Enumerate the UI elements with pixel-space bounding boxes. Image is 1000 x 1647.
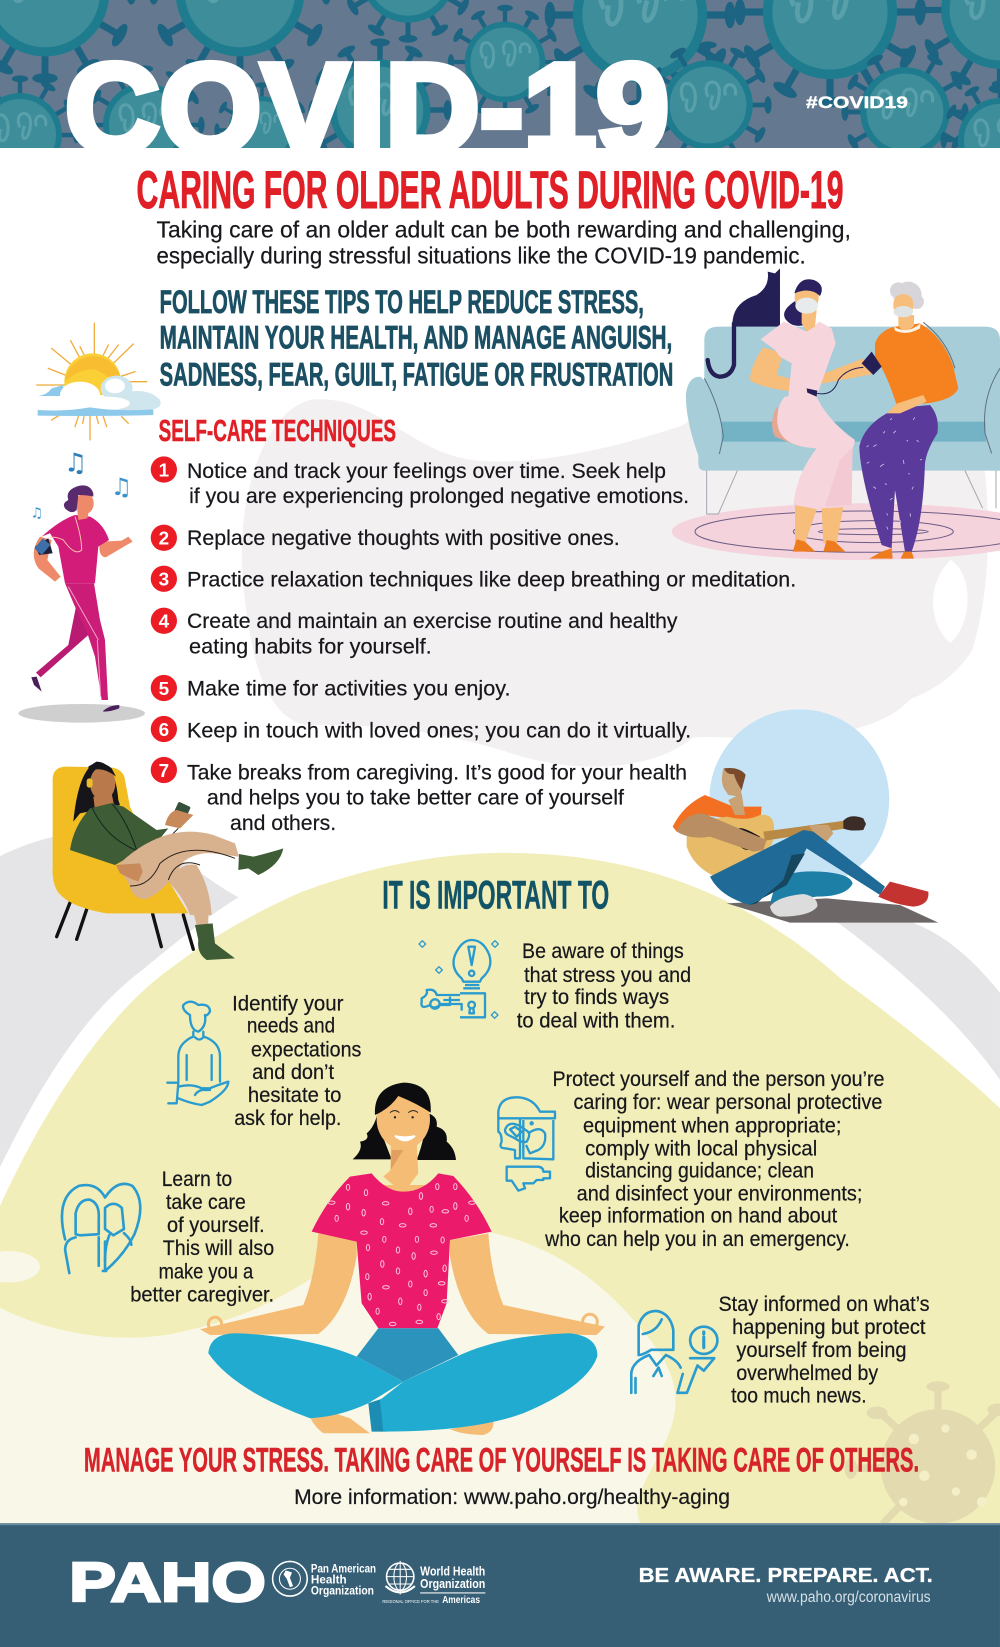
text: be aware [517,939,691,1032]
intro paragraph: especially during stressful situations like the COVID-19 pandemic. [157,243,806,269]
icon: couple inside heart [62,1184,140,1273]
text: learn to take care [130,1167,274,1306]
text: identify your needs: and don’t [252,1060,334,1084]
cat [708,268,780,377]
icon: person in open hand [167,1002,228,1105]
text: protect yourself: distancing guidance; clean [585,1158,814,1182]
item 3: 3 [159,570,169,591]
PAHO name: Health [311,1572,347,1586]
item 1 [151,456,689,508]
item 7: and helps you to take better care of yourself [207,786,625,810]
intro paragraph: Taking care of an older adult can be both rewarding and challenging, [157,216,851,242]
hair sides [353,1110,392,1159]
item 2: 2 [159,529,169,550]
text: stay informed: happening but protect [732,1315,925,1339]
WHO name: World Health [420,1565,485,1579]
PAHO name: Pan American [311,1561,376,1575]
item 7 [151,757,687,835]
shirt [312,1173,492,1328]
text: stay informed: Stay informed on what’s [718,1292,930,1316]
item 7: and others. [230,811,336,835]
item 4: Create and maintain an exercise routine and healthy [187,609,678,633]
item 1: if you are experiencing prolonged negative emotions. [189,484,689,508]
main title COVID-19: COVID-19 [65,37,669,179]
header banner [0,0,1000,148]
item 6: Keep in touch with loved ones; you can do it virtually. [187,718,691,742]
text: protect yourself: equipment when appropriate; [583,1113,841,1137]
icon: WHO emblem [385,1561,415,1595]
illustration: woman jogging with music [18,449,145,723]
PAHO name: Organization [311,1584,374,1598]
icon: light bulb and key [419,940,498,1018]
text: protect yourself: and disinfect your environments; [577,1182,862,1206]
item 4: 4 [159,612,170,633]
footer url: www.paho.org/coronavirus [766,1589,931,1606]
WHO name: REGIONAL OFFICE FOR THE [382,1599,439,1605]
WHO name: Organization [420,1577,485,1591]
text: protect yourself: Protect yourself and the person you’re [553,1067,884,1091]
text: protect yourself: comply with local physical [585,1136,817,1160]
music notes [31,449,132,521]
rug [672,503,1000,560]
text: identify your needs: hesitate to [248,1083,341,1107]
item 4: eating habits for yourself. [189,634,432,658]
music notes: ♫ [64,449,87,479]
older woman [859,282,958,559]
music notes: ♫ [111,473,132,501]
item 6: 6 [159,720,169,741]
text: learn to take care: better caregiver. [130,1282,274,1306]
text: stay informed: yourself from being [736,1338,906,1362]
illustration: meditating woman [200,1083,605,1435]
sofa [686,327,1000,514]
PAHO logo text: PAHO [69,1552,266,1613]
text: stay informed: too much news. [731,1383,867,1407]
WHO name: Americas [442,1595,480,1606]
illustration: nurse and older woman on sofa [672,268,1000,560]
header virus pattern [0,0,1000,148]
heading: follow these tips: FOLLOW THESE TIPS TO HELP REDUCE STRESS, [160,284,644,320]
text: learn to take care: make you a [159,1259,253,1283]
item 1: Notice and track your feelings over time. Seek help [187,459,666,483]
PAHO name [311,1561,376,1598]
text: be aware: to deal with them. [517,1008,675,1032]
item 4 [151,608,678,658]
item 7: Take breaks from caregiving. It’s good for your health [187,760,687,784]
intro paragraph [157,216,851,269]
text: learn to take care: This will also [163,1236,274,1260]
text: be aware: Be aware of things [522,939,684,963]
hashtag: #COVID19 [806,93,908,112]
text: stay informed [718,1292,930,1407]
text: protect yourself: keep information on hand about [559,1204,837,1228]
item 5: 5 [159,679,169,700]
item 3: Practice relaxation techniques like deep breathing or meditation. [187,568,796,592]
text: protect yourself [544,1067,884,1251]
tagline: BE AWARE. PREPARE. ACT. [639,1565,933,1587]
background virus bottom right [845,1381,1000,1524]
text: learn to take care: of yourself. [167,1213,265,1237]
music notes: ♫ [31,505,43,521]
text: learn to take care: Learn to [162,1167,232,1191]
WHO name [382,1565,485,1606]
item 1: 1 [159,460,169,481]
item 2: Replace negative thoughts with positive ones. [187,526,620,550]
text: identify your needs [232,991,361,1130]
icon: PAHO emblem [273,1561,307,1596]
background shapes [0,347,1000,1524]
heading: follow these tips [160,284,673,392]
text: be aware: try to finds ways [524,985,669,1009]
nurse [750,279,873,552]
text: stay informed: overwhelmed by [736,1361,878,1385]
heading: follow these tips: SADNESS, FEAR, GUILT, FATIGUE OR FRUSTRATION [160,356,673,392]
text: learn to take care: take care [166,1190,246,1214]
item 7: 7 [159,761,169,782]
jeans [357,1328,458,1382]
footer band [0,1523,1000,1647]
text: be aware: that stress you and [524,963,691,987]
text: identify your needs: expectations [251,1038,361,1062]
text: identify your needs: ask for help. [234,1106,341,1130]
illustration: man playing guitar [673,709,938,923]
text: identify your needs: Identify your [232,991,343,1015]
heading: follow these tips: MAINTAIN YOUR HEALTH, AND MANAGE ANGUISH, [160,320,672,356]
heading: it is important to: IT IS IMPORTANT TO [382,874,609,918]
text: protect yourself: caring for: wear personal protective [574,1090,882,1114]
more information link: More information: www.paho.org/healthy-aging [294,1485,730,1509]
blue circle backdrop [709,709,889,889]
icon: woman with information symbol [631,1311,717,1393]
icon: face shield with mask and glove [498,1097,555,1191]
text: protect yourself: who can help you in an emergency. [544,1227,850,1251]
icon: sun behind clouds [37,323,161,440]
list: self-care techniques [151,456,796,835]
text: identify your needs: needs and [247,1014,335,1038]
illustration: woman relaxing in yellow chair [52,762,283,960]
item 5: Make time for activities you enjoy. [187,676,510,700]
heading: self-care techniques: SELF-CARE TECHNIQUES [159,414,396,448]
